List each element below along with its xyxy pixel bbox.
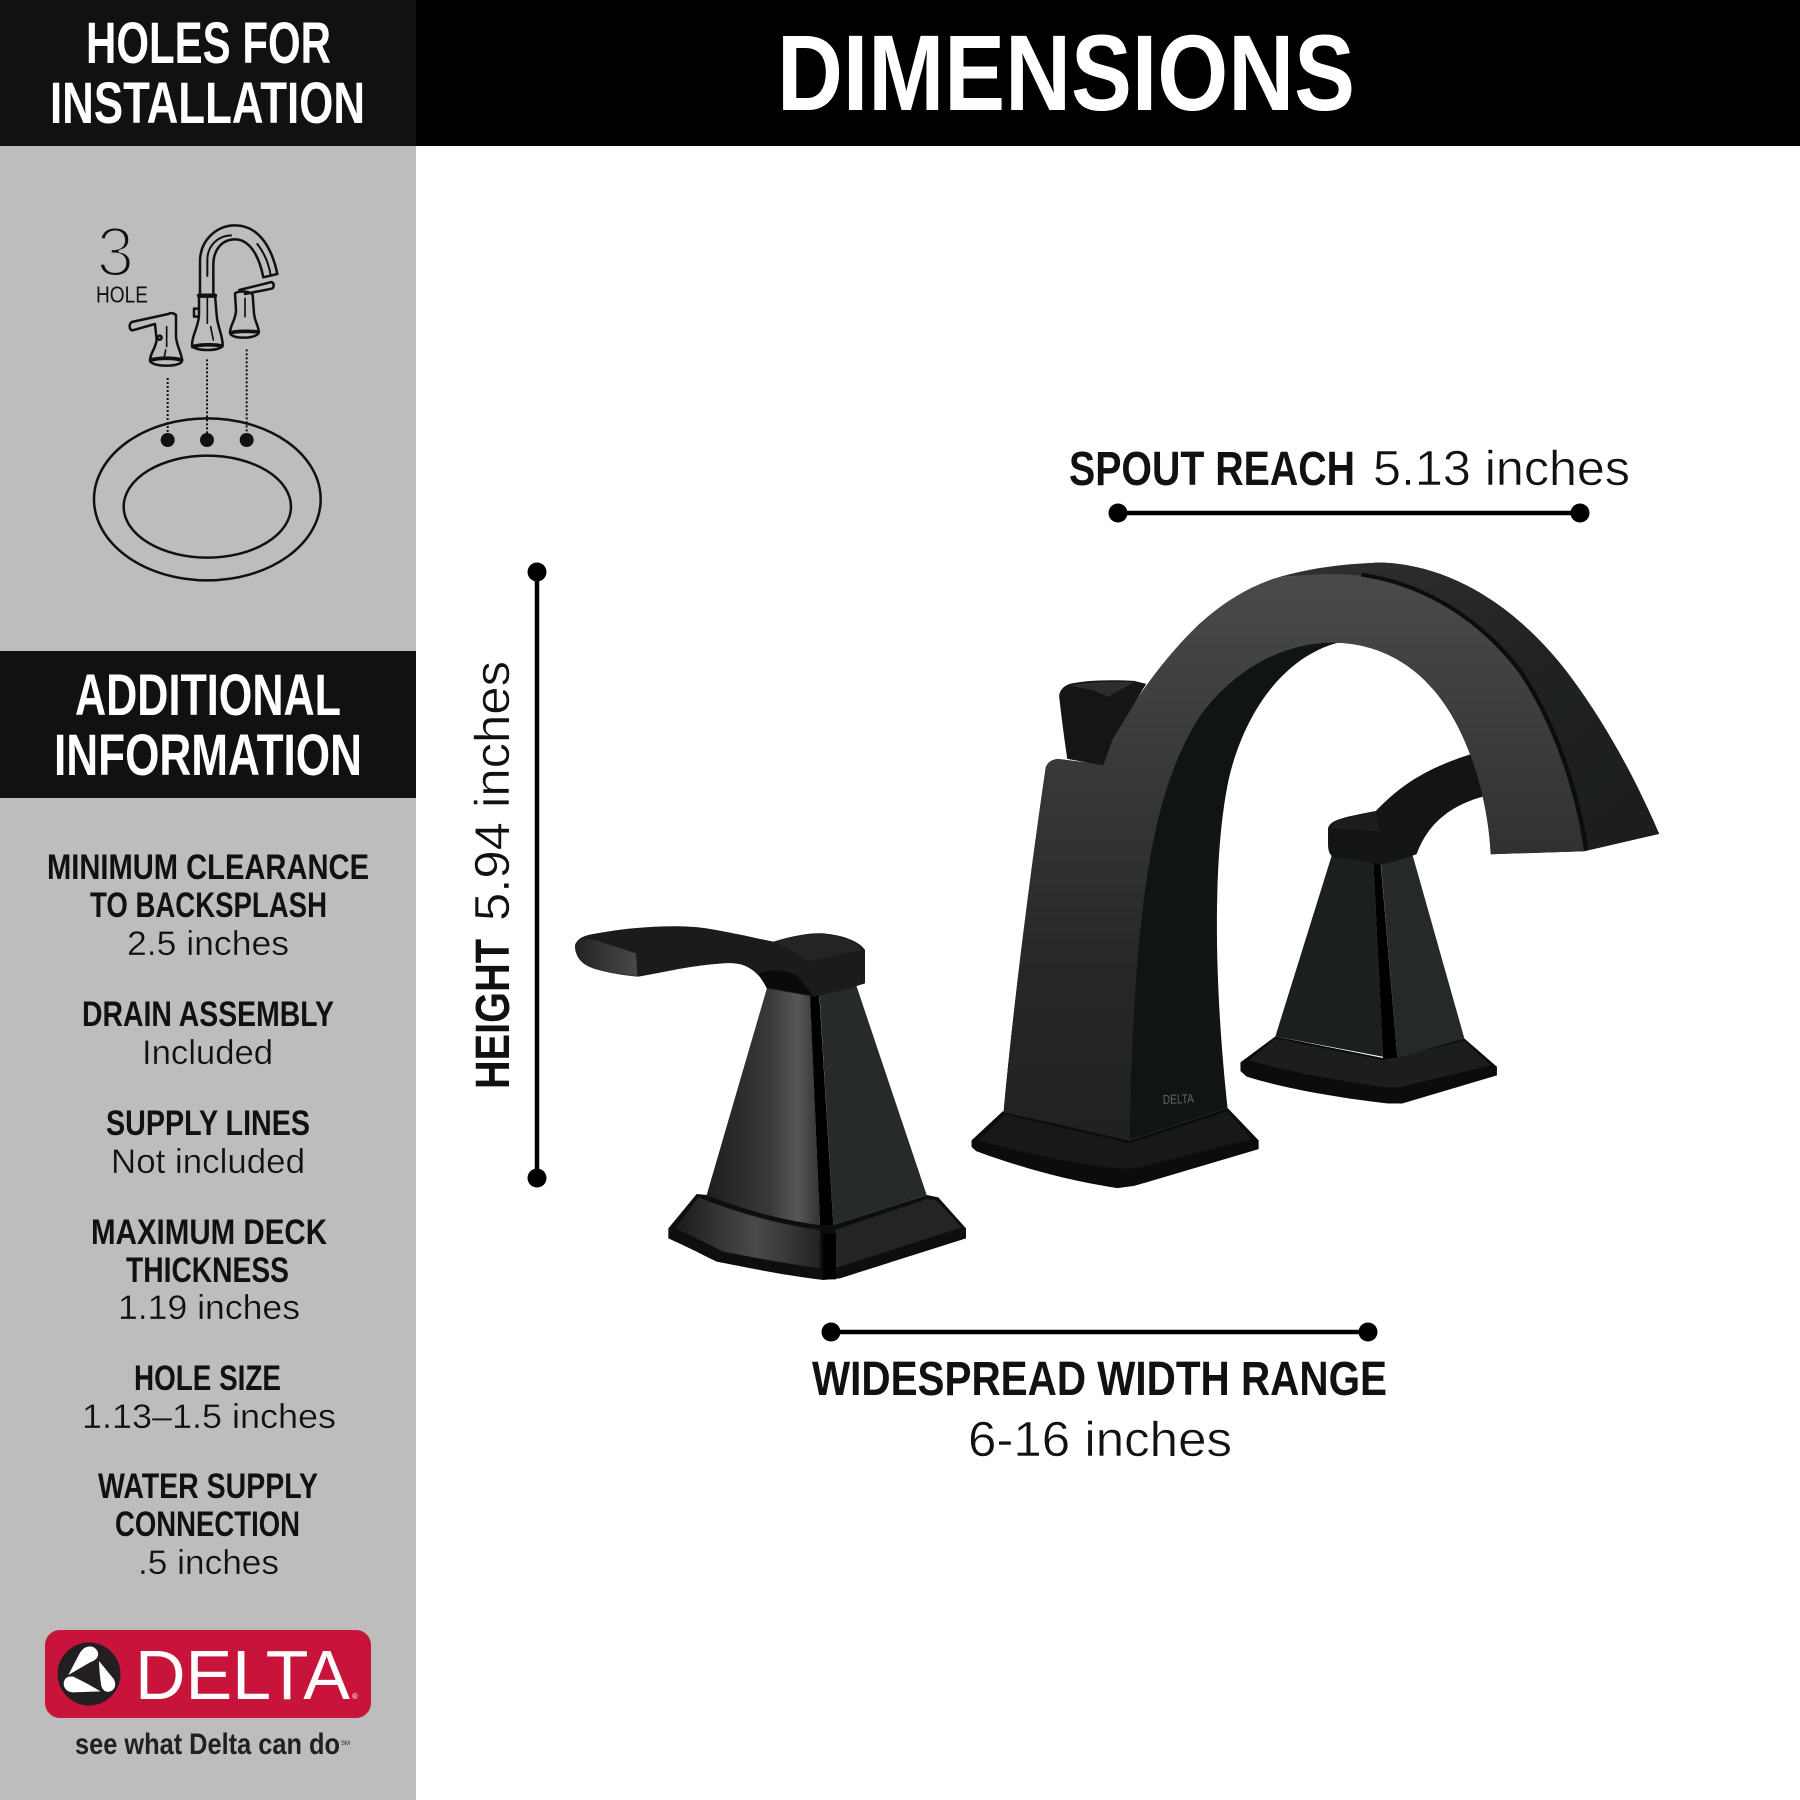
spec: water supply connection — [98, 1467, 318, 1582]
icon: three hole sink diagram: 3 — [97, 213, 134, 291]
heading bar: dimensions: DIMENSIONS — [777, 12, 1355, 133]
dimension: height: 5.94 inches — [466, 661, 520, 921]
heading bar: holes for installation — [0, 0, 416, 146]
spec: minimum clearance to backsplash: 2.5 inches — [127, 925, 289, 963]
logo: delta: ® — [352, 1692, 358, 1701]
spec: water supply connection: CONNECTION — [115, 1505, 300, 1544]
icon: three hole sink diagram — [94, 213, 321, 580]
faucet: main spout — [972, 563, 1659, 1188]
spec: maximum deck thickness: 1.19 inches — [118, 1289, 300, 1327]
spec: hole size: 1.13–1.5 inches — [82, 1398, 336, 1436]
logo: delta: see what Delta can do — [75, 1728, 340, 1761]
dimension: height: HEIGHT — [467, 939, 520, 1089]
dimension: spout reach: 5.13 inches — [1373, 442, 1630, 496]
logo: delta: DELTA — [135, 1636, 350, 1714]
heading bar: additional information: INFORMATION — [54, 723, 362, 788]
spec: supply lines — [106, 1104, 310, 1181]
spec: hole size — [82, 1359, 336, 1436]
spec: supply lines: SUPPLY LINES — [106, 1104, 310, 1143]
spec: water supply connection: WATER SUPPLY — [98, 1467, 318, 1506]
dimension: spout reach — [1069, 442, 1630, 522]
spec: supply lines: Not included — [111, 1143, 305, 1181]
dimension: widespread width range: WIDESPREAD WIDTH RANGE — [812, 1353, 1387, 1406]
spec: minimum clearance to backsplash: TO BACKSPLASH — [90, 886, 327, 925]
spec: drain assembly: Included — [142, 1034, 273, 1072]
panel: sidebar background — [0, 0, 416, 1800]
spec: water supply connection: .5 inches — [138, 1544, 279, 1582]
spec: drain assembly — [82, 995, 334, 1072]
spec: maximum deck thickness: MAXIMUM DECK — [91, 1213, 327, 1252]
spec: hole size: HOLE SIZE — [134, 1359, 281, 1398]
heading bar: additional information — [0, 651, 416, 798]
spec: maximum deck thickness: THICKNESS — [126, 1251, 289, 1290]
heading bar: dimensions — [416, 0, 1800, 146]
dimension: height — [466, 562, 546, 1188]
heading bar: holes for installation: HOLES FOR — [86, 11, 331, 76]
logo: delta: SM — [341, 1741, 350, 1747]
text: delta mark on faucet: DELTA — [1163, 1091, 1194, 1107]
logo: delta — [45, 1630, 371, 1761]
spec: maximum deck thickness — [91, 1213, 327, 1327]
dimension: widespread width range: 6-16 inches — [968, 1413, 1232, 1467]
spec: minimum clearance to backsplash: MINIMUM CLEARANCE — [47, 848, 369, 887]
heading bar: additional information: ADDITIONAL — [75, 663, 341, 728]
icon: three hole sink diagram: HOLE — [96, 281, 148, 307]
heading bar: holes for installation: INSTALLATION — [50, 71, 365, 136]
dimension: widespread width range — [812, 1322, 1387, 1467]
faucet: right handle — [1240, 753, 1497, 1104]
spec: drain assembly: DRAIN ASSEMBLY — [82, 995, 334, 1034]
faucet: left handle — [575, 926, 966, 1280]
dimension: spout reach: SPOUT REACH — [1069, 443, 1355, 496]
spec: minimum clearance to backsplash — [47, 848, 369, 963]
